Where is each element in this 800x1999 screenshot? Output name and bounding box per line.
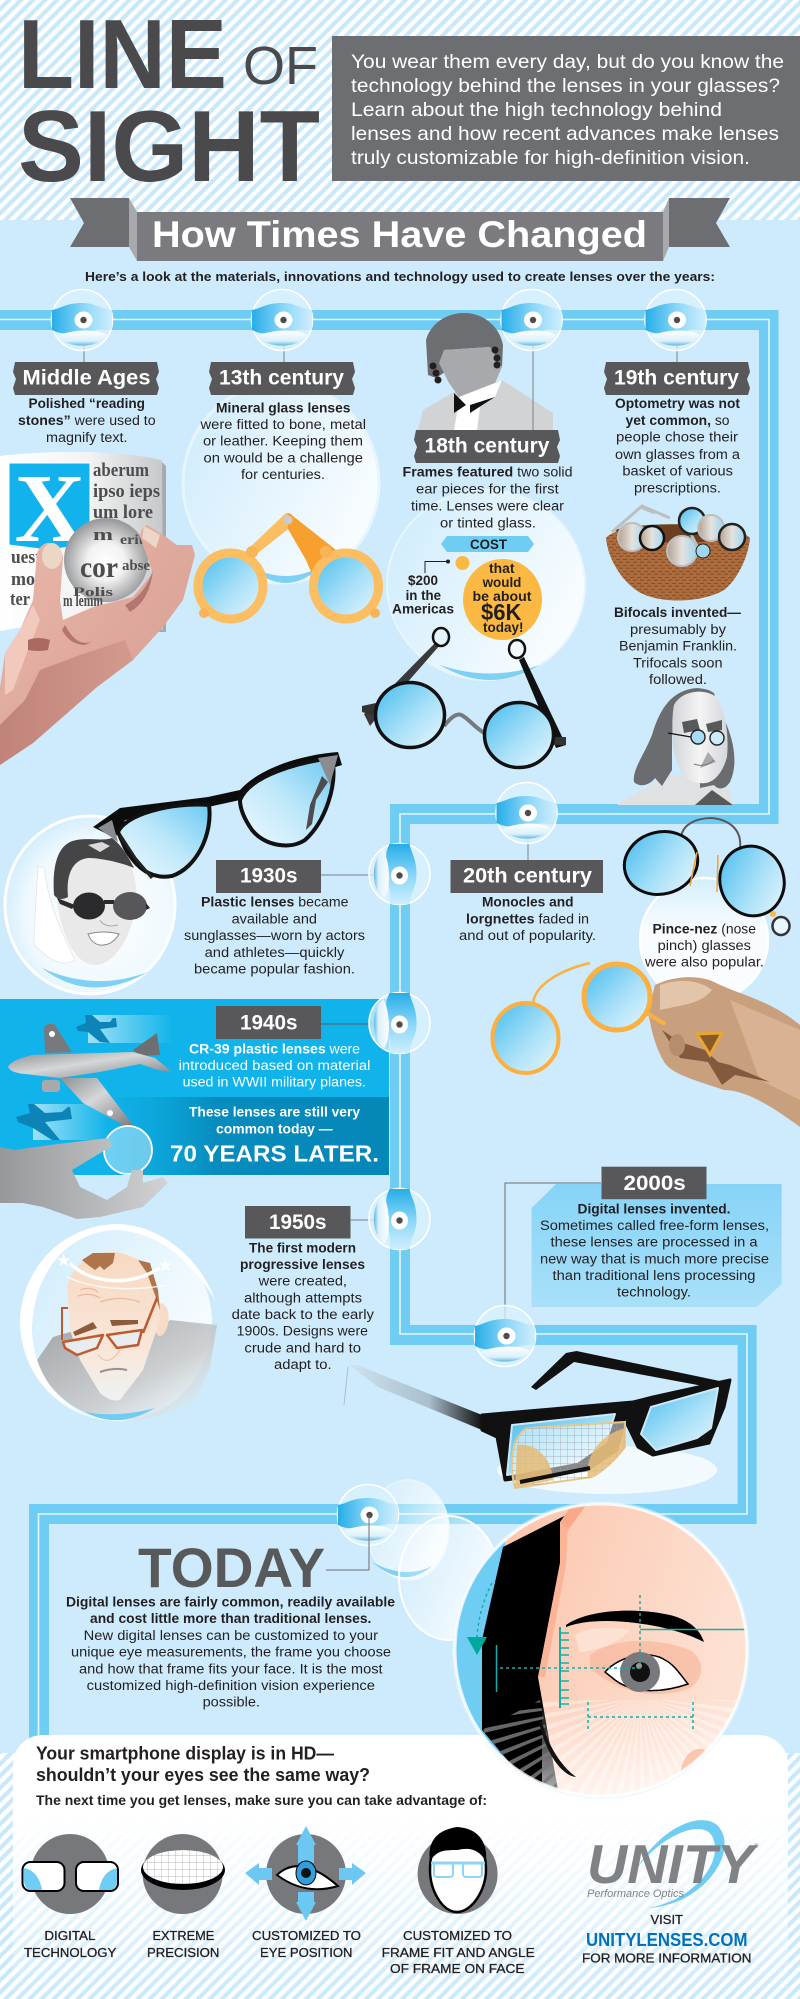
timeline node xyxy=(496,782,557,860)
label: CUSTOMIZED TO xyxy=(252,1928,361,1943)
intro text panel: technology behind the lenses in your glasses? xyxy=(351,75,780,97)
panel: 1930s xyxy=(5,752,430,994)
panel: Middle Ages xyxy=(0,290,195,765)
callout: $200 in the Americas: $200 xyxy=(408,573,438,588)
text block: sunglasses—worn by actors xyxy=(184,928,365,943)
connector line xyxy=(505,1183,601,1335)
illustration: book with magnifying stone and hand: m lemm xyxy=(63,591,103,610)
illustration: book with magnifying stone and hand: uest xyxy=(11,547,42,568)
text block xyxy=(66,1595,395,1710)
illustration: orange lorgnette glasses xyxy=(198,513,380,619)
illustration: Benjamin Franklin xyxy=(617,688,734,805)
heading tag xyxy=(216,860,399,893)
panel: Today xyxy=(66,1480,499,1710)
Unity logo xyxy=(587,1820,759,1908)
text block: were fitted to bone, metal xyxy=(199,417,366,432)
intro text panel: Learn about the high technology behind xyxy=(351,99,722,121)
text block xyxy=(615,396,741,495)
heading tag xyxy=(604,362,750,395)
title: SIGHT xyxy=(18,91,320,203)
heading tag: 1940s xyxy=(240,1011,298,1034)
text block: Digital lenses invented. xyxy=(578,1201,730,1216)
text block xyxy=(402,465,572,530)
timeline node xyxy=(338,1484,398,1546)
illustration: gloved hand holding lens xyxy=(0,1126,168,1219)
label xyxy=(382,1928,535,1976)
heading ribbon: How Times Have Changed xyxy=(70,198,730,261)
callout text: pince-nez: Pince-nez (nose xyxy=(652,921,756,936)
benefit: extreme precision xyxy=(141,1834,225,1960)
title: LINE xyxy=(18,0,227,109)
intro text panel: You wear them every day, but do you know the xyxy=(351,51,784,73)
text block: became popular fashion. xyxy=(194,962,355,976)
illustration: book with magnifying stone and hand xyxy=(0,452,195,765)
footer heading xyxy=(36,1743,487,1808)
lens bubbles xyxy=(367,1480,499,1640)
illustration: book with magnifying stone and hand: mo xyxy=(11,569,35,590)
heading tag xyxy=(450,860,603,893)
text block xyxy=(232,1240,374,1372)
label: EXTREME xyxy=(152,1928,215,1943)
call to action: FOR MORE INFORMATION xyxy=(582,1951,752,1966)
text block: new way that is much more precise xyxy=(540,1251,769,1266)
illustration: man with dizzy eyes in lens bubble: ★ xyxy=(158,1256,173,1275)
illustration: round glasses with ear loops xyxy=(362,628,566,768)
callout: that would be about $6K today: be about xyxy=(472,589,532,604)
callout: that would be about $6K today xyxy=(463,559,542,640)
timeline node xyxy=(252,290,312,362)
text block: and athletes—quickly xyxy=(205,945,345,960)
text block: available and xyxy=(232,911,317,926)
callout text: pince-nez: were also popular. xyxy=(644,955,764,970)
illustration: pince-nez glasses xyxy=(617,818,792,935)
text block: bifocals: Trifocals soon xyxy=(633,655,722,670)
benefit: customized to eye position xyxy=(245,1826,366,1960)
illustration: man with dizzy eyes in lens bubble: ★ xyxy=(56,1251,71,1270)
text block: Sometimes called free-form lenses, xyxy=(540,1218,769,1233)
label xyxy=(147,1928,219,1960)
text block: bifocals: presumably by xyxy=(630,622,726,637)
label: FRAME FIT AND ANGLE xyxy=(382,1945,535,1960)
callout: that would be about $6K today: that xyxy=(489,561,515,576)
callout: 70 years later xyxy=(170,1105,379,1167)
text block: introduced based on material xyxy=(179,1058,370,1073)
text block: adapt to. xyxy=(274,1357,332,1372)
footer heading: The next time you get lenses, make sure you can take advantage of: xyxy=(36,1793,487,1808)
timeline node xyxy=(369,1188,430,1250)
illustration: basket of glasses xyxy=(606,506,750,600)
text block: bifocals: Bifocals invented— xyxy=(614,605,742,620)
illustration: book with magnifying stone and hand: m xyxy=(93,525,113,544)
text block: people chose their xyxy=(616,430,739,445)
footer heading: Your smartphone display is in HD— xyxy=(36,1743,334,1763)
call to action: VISIT xyxy=(650,1912,683,1927)
text block: on would be a challenge xyxy=(204,450,363,465)
text block: prescriptions. xyxy=(634,480,721,495)
timeline node xyxy=(501,290,562,431)
text block: or leather. Keeping them xyxy=(203,434,363,449)
text block: own glasses from a xyxy=(615,447,741,462)
heading ribbon: How Times Have Changed: How Times Have Changed xyxy=(152,214,647,255)
text block: technology. xyxy=(617,1285,691,1300)
cost tag: COST xyxy=(470,537,508,552)
label xyxy=(252,1928,361,1960)
panel: 13th century xyxy=(183,290,380,619)
text block: date back to the early xyxy=(232,1307,374,1322)
illustration: man with dizzy eyes in lens bubble xyxy=(20,1224,217,1421)
text block: these lenses are processed in a xyxy=(550,1235,758,1250)
panel: 18th century xyxy=(362,290,585,768)
illustration: book with magnifying stone and hand: um lore xyxy=(93,502,153,523)
text block: yet common, so xyxy=(626,413,730,428)
text block: progressive lenses xyxy=(240,1257,365,1272)
heading tag: 20th century xyxy=(463,865,592,888)
illustration: book with magnifying stone and hand: cor xyxy=(80,551,118,584)
text block: stones” were used to xyxy=(18,413,156,428)
illustration: book with magnifying stone and hand: X xyxy=(15,455,85,563)
callout: $200 in the Americas: in the xyxy=(406,588,441,603)
heading tag: 13th century xyxy=(219,366,344,389)
label: EYE POSITION xyxy=(260,1945,352,1960)
text block xyxy=(179,1041,370,1090)
label xyxy=(24,1928,117,1960)
callout bubble: pince-nez background xyxy=(640,878,768,1002)
icon: glasses xyxy=(22,1834,118,1914)
intro text panel: lenses and how recent advances make lenses xyxy=(351,123,779,145)
callout: that would be about $6K today: today! xyxy=(483,620,524,635)
lens bubble xyxy=(183,383,379,583)
call to action: UNITYLENSES.COM xyxy=(586,1930,748,1950)
heading tag xyxy=(216,1006,399,1039)
title: OF xyxy=(243,36,318,96)
subtitle: Here’s a look at the materials, innovations and technology used to create lenses over the years: xyxy=(85,270,715,284)
heading tag xyxy=(602,1167,706,1199)
illustration: book with magnifying stone and hand: Polis xyxy=(73,584,113,599)
hatched footer background xyxy=(0,1753,800,1999)
illustration: book with magnifying stone and hand: aberum xyxy=(93,460,149,481)
illustration: book with magnifying stone and hand: abse xyxy=(122,558,150,574)
panel: 20th century xyxy=(450,782,800,1127)
heading tag: 2000s xyxy=(624,1172,686,1195)
callout text: pince-nez: pinch) glasses xyxy=(658,938,751,953)
heading: TODAY xyxy=(138,1536,325,1599)
intro text panel xyxy=(332,36,800,181)
callout: that would be about $6K today: $6K xyxy=(481,599,522,625)
icon: lens with grid xyxy=(141,1834,225,1914)
text block: bifocals: Benjamin Franklin. xyxy=(619,639,737,654)
heading xyxy=(138,1515,369,1599)
text block: lorgnettes faded in xyxy=(466,911,589,926)
callout text: pince-nez xyxy=(644,921,764,970)
text block: magnify text. xyxy=(46,430,128,445)
illustration: black rectangular glasses with digital lens grid xyxy=(344,1351,730,1494)
illustration: woman in sunglasses in lens bubble xyxy=(5,816,175,994)
text block xyxy=(459,895,596,943)
illustration: man in wig xyxy=(418,313,553,430)
text block: 1900s. Designs were xyxy=(237,1324,368,1339)
label: TECHNOLOGY xyxy=(24,1945,117,1960)
heading tag xyxy=(245,1206,399,1238)
callout: 70 years later: These lenses are still very xyxy=(189,1105,360,1120)
panel: 2000s xyxy=(344,1167,782,1494)
call to action xyxy=(582,1912,752,1966)
heading tag xyxy=(209,362,355,395)
title xyxy=(18,0,320,203)
heading tag: Middle Ages xyxy=(22,366,150,389)
text block: ear pieces for the first xyxy=(416,481,559,496)
intro text panel: truly customizable for high-definition vision. xyxy=(351,147,750,169)
heading tag: 1950s xyxy=(269,1211,326,1234)
text block: although attempts xyxy=(244,1290,362,1305)
Unity logo: UNITY xyxy=(587,1833,758,1895)
text block: Optometry was not xyxy=(615,396,741,411)
text block: and out of popularity. xyxy=(459,928,596,943)
text block: bifocals: followed. xyxy=(649,672,707,687)
text block: basket of various xyxy=(622,464,733,479)
timeline node xyxy=(369,992,430,1054)
icon: face with glasses xyxy=(418,1827,498,1914)
text block: than traditional lens processing xyxy=(552,1268,756,1283)
text block: Plastic lenses became xyxy=(201,895,348,910)
timeline node xyxy=(474,1306,536,1366)
text block: Mineral glass lenses xyxy=(216,400,350,415)
text block: for centuries. xyxy=(241,467,325,482)
text block: CR-39 plastic lenses were xyxy=(189,1041,360,1056)
callout: 70 years later: common today — xyxy=(216,1121,333,1136)
heading tag: 18th century xyxy=(424,435,550,458)
text block xyxy=(184,895,365,976)
text block: The first modern xyxy=(249,1240,356,1255)
text block xyxy=(540,1201,769,1300)
text block: and cost little more than traditional lenses. xyxy=(90,1611,371,1626)
callout: that would be about $6K today: would xyxy=(482,575,521,590)
heading tag xyxy=(13,362,159,395)
illustration: cat-eye glasses xyxy=(93,752,342,878)
text block xyxy=(18,396,156,445)
icon: eye with arrows xyxy=(245,1826,366,1921)
text block: used in WWII military planes. xyxy=(183,1075,366,1090)
cost tag xyxy=(441,536,534,552)
text block: Frames featured two solid xyxy=(402,465,572,480)
blue panel background xyxy=(532,1184,782,1307)
text block: were created, xyxy=(258,1274,347,1289)
panel: 1950s xyxy=(20,1188,430,1421)
text block: possible. xyxy=(203,1695,260,1710)
footer card xyxy=(13,1735,788,1999)
illustration: book with magnifying stone and hand: ter xyxy=(10,589,30,610)
label: OF FRAME ON FACE xyxy=(390,1961,525,1976)
timeline node xyxy=(645,290,706,362)
text block: Digital lenses are fairly common, readily available xyxy=(66,1595,395,1610)
text block: Polished “reading xyxy=(28,396,145,411)
illustration: silver airplane xyxy=(8,1024,172,1127)
text block: unique eye measurements, the frame you choose xyxy=(71,1645,391,1660)
footer heading: shouldn’t your eyes see the same way? xyxy=(36,1765,370,1785)
text block: bifocals xyxy=(614,605,742,687)
panel: 19th century xyxy=(604,290,750,805)
illustration: fading plane silhouettes xyxy=(16,1015,173,1140)
label: DIGITAL xyxy=(44,1928,95,1943)
heading tag xyxy=(414,430,560,463)
text block: customized high-definition vision experience xyxy=(87,1678,375,1693)
label: PRECISION xyxy=(147,1945,219,1960)
illustration: orange lorgnette in hand xyxy=(492,963,800,1127)
text block: Monocles and xyxy=(482,895,574,910)
callout: 70 years later: 70 YEARS LATER. xyxy=(170,1141,379,1167)
text block: and how that frame fits your face. It is the most xyxy=(79,1661,383,1676)
label: CUSTOMIZED TO xyxy=(403,1928,512,1943)
callout: $200 in the Americas: Americas xyxy=(392,601,454,616)
lens bubble xyxy=(387,490,585,680)
text block: New digital lenses can be customized to your xyxy=(84,1628,379,1643)
darker lower band xyxy=(100,1097,389,1175)
Unity logo: Performance Optics xyxy=(587,1888,684,1900)
timeline node xyxy=(369,844,430,904)
benefit: digital technology xyxy=(22,1834,118,1960)
hatched header background xyxy=(0,0,800,220)
text block xyxy=(199,400,366,482)
blue band xyxy=(0,999,389,1175)
illustration: book with magnifying stone and hand: erit xyxy=(120,533,144,548)
Unity logo: ® xyxy=(754,1843,759,1850)
heading tag: 1930s xyxy=(240,865,298,888)
heading tag: 19th century xyxy=(614,366,739,389)
timeline pipe xyxy=(0,310,778,1760)
callout: $200 in the Americas xyxy=(392,556,470,616)
benefit: customized to frame fit xyxy=(382,1827,535,1976)
text block: crude and hard to xyxy=(244,1340,361,1355)
text block: time. Lenses were clear xyxy=(411,499,565,514)
text block: or tinted glass. xyxy=(440,515,536,530)
illustration: book with magnifying stone and hand: ipso ieps xyxy=(93,481,160,502)
illustration: face with eye measurements xyxy=(450,1500,762,1802)
timeline node xyxy=(52,290,112,362)
panel: 1940s xyxy=(0,992,430,1219)
